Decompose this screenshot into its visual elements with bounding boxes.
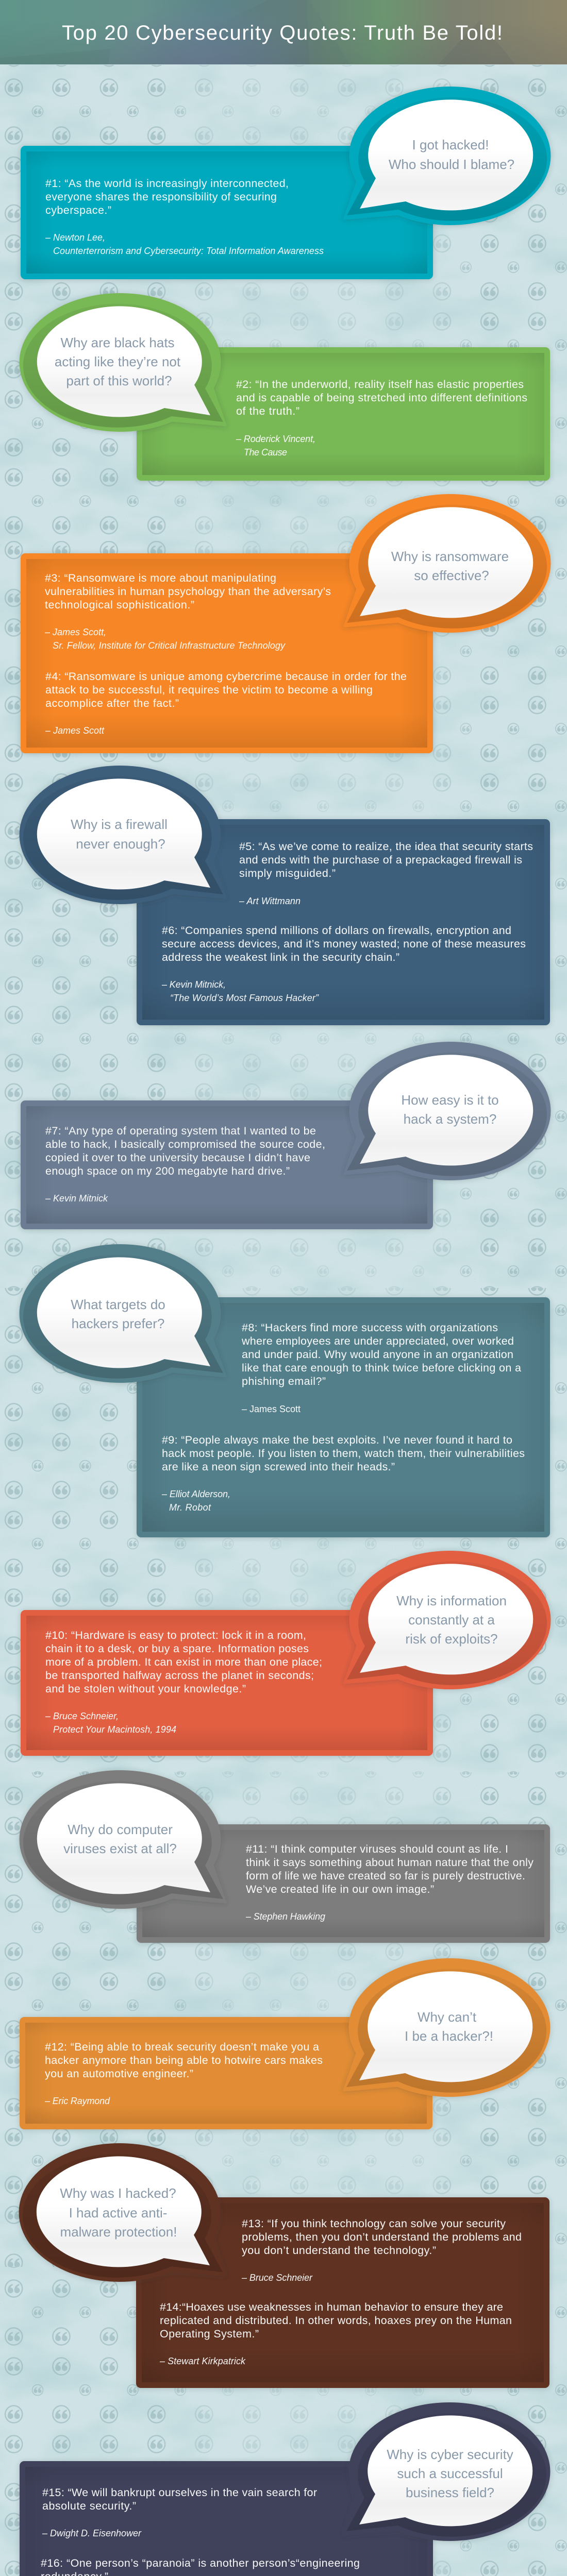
panel: quotes 13 and 14: Operating System.”	[160, 2328, 259, 2340]
panel: quotes 3 and 4: attack to be successful, it requires the victim to become a willing	[45, 684, 373, 696]
panel: quotes 3 and 4: – James Scott	[45, 725, 105, 736]
panel: quote 11: We’ve created life in our own image.”	[246, 1883, 434, 1895]
speech bubble 1	[345, 88, 549, 224]
speech bubble 9: Why can’t	[418, 2009, 477, 2025]
speech bubble 11: such a successful	[397, 2466, 503, 2481]
speech bubble 3: Why is ransomware	[391, 549, 509, 564]
speech bubble 10	[20, 2144, 225, 2280]
speech bubble 2: acting like they’re not	[55, 354, 181, 369]
panel: quotes 15 and 16: #15: “We will bankrupt ourselves in the vain search for	[42, 2486, 317, 2499]
panel: quote 10: Protect Your Macintosh, 1994	[53, 1724, 176, 1735]
panel: quote 12: you an automotive engineer.”	[45, 2067, 193, 2080]
speech bubble 10: I had active anti-	[69, 2205, 167, 2221]
panel: quotes 5 and 6: secure access devices, and it’s money wasted; none of these measures	[162, 938, 526, 950]
panel: quote 2: of the truth.”	[236, 405, 299, 417]
speech bubble 7: Why is information	[396, 1593, 507, 1608]
panel: quote 11: form of life we have created so far is purely destructive.	[246, 1870, 525, 1882]
panel: quote 1: cyberspace.”	[45, 204, 111, 216]
panel: quote 7	[21, 1100, 433, 1229]
speech bubble 7: risk of exploits?	[405, 1631, 498, 1647]
header banner	[0, 0, 567, 64]
panel: quotes 8 and 9: like that care enough to think twice before clicking on a	[242, 1362, 521, 1374]
speech bubble 5	[345, 1043, 549, 1179]
speech bubble 6: hackers prefer?	[72, 1316, 164, 1331]
speech bubble 1: Who should I blame?	[389, 157, 514, 172]
speech bubble 7: constantly at a	[408, 1612, 495, 1628]
panel: quotes 8 and 9: – Elliot Alderson,	[161, 1489, 230, 1499]
panel: quotes 8 and 9: are like a neon sign screwed into their heads.”	[162, 1461, 395, 1473]
panel: quotes 3 and 4	[21, 553, 433, 753]
panel: quote 10: and be stolen without your knowledge.”	[45, 1683, 246, 1695]
panel: quotes 8 and 9: #9: “People always make the best exploits. I’ve never found it hard to	[162, 1434, 512, 1446]
speech bubble 2: Why are black hats	[60, 335, 175, 350]
speech bubble 4: never enough?	[76, 836, 165, 852]
panel: quotes 5 and 6: and ends with the purchase of a prepackaged firewall is	[239, 854, 522, 866]
speech bubble 4: Why is a firewall	[71, 817, 168, 832]
panel: quote 7: enough space on my 200 megabyte hard drive.”	[45, 1165, 290, 1177]
speech bubble 11: Why is cyber security	[387, 2447, 513, 2462]
panel: quote 2: The Cause	[244, 447, 287, 457]
speech bubble 3	[345, 495, 549, 631]
panel: quote 10	[21, 1610, 433, 1756]
panel: quote 2	[137, 347, 550, 481]
panel: quotes 3 and 4: technological sophistication.”	[45, 599, 194, 611]
panel: quotes 15 and 16: – Dwight D. Eisenhower	[42, 2528, 142, 2538]
panel: quote 11: – Stephen Hawking	[245, 1911, 325, 1922]
panel: quotes 3 and 4: #3: “Ransomware is more about manipulating	[45, 572, 276, 584]
panel: quotes 3 and 4: – James Scott,	[44, 627, 106, 637]
panel: quote 11: think it says something about human nature that the only	[246, 1856, 533, 1869]
speech bubble 7	[345, 1552, 549, 1688]
panel: quote 2: #2: “In the underworld, reality itself has elastic properties	[236, 378, 524, 391]
panel: quotes 5 and 6: #5: “As we’ve come to realize, the idea that security starts	[239, 840, 533, 853]
panel: quotes 3 and 4: vulnerabilities in human psychology than the adversary’s	[45, 585, 331, 598]
panel: quote 10: #10: “Hardware is easy to protect: lock it in a room,	[45, 1629, 306, 1641]
panel: quote 7: #7: “Any type of operating system that I wanted to be	[45, 1125, 316, 1137]
speech bubble 2	[21, 294, 225, 430]
panel: quotes 13 and 14	[136, 2197, 549, 2388]
speech bubble 9	[344, 1959, 549, 2095]
panel: quotes 8 and 9	[137, 1297, 550, 1537]
panel: quote 7: copied it over to the university because I didn’t have	[45, 1151, 310, 1164]
panel: quotes 8 and 9: #8: “Hackers find more success with organizations	[242, 1321, 498, 1334]
title: Top 20 Cybersecurity Quotes: Truth Be Told!	[62, 22, 503, 44]
panel: quotes 5 and 6: address the weakest link in the security chain.”	[162, 951, 399, 963]
panel: quotes 5 and 6: simply misguided.”	[239, 867, 336, 879]
panel: quote 12: #12: “Being able to break security doesn’t make you a	[45, 2041, 319, 2053]
panel: quotes 8 and 9: and under paid. Why would anyone in an organization	[242, 1348, 513, 1361]
panel: quote 1: Counterterrorism and Cybersecurity: Total Information Awareness	[53, 246, 324, 256]
panel: quote 10: chain it to a desk, or buy a spare. Information poses	[45, 1642, 309, 1655]
speech bubble 5: How easy is it to	[401, 1092, 499, 1108]
panel: quote 11: #11: “I think computer viruses should count as life. I	[246, 1843, 508, 1855]
panel: quote 2: – Roderick Vincent,	[236, 434, 315, 444]
panel: quotes 8 and 9: phishing email?”	[242, 1375, 326, 1387]
panel: quotes 15 and 16: absolute security.”	[42, 2500, 136, 2512]
panel: quotes 13 and 14: – Stewart Kirkpatrick	[159, 2356, 246, 2366]
panel: quote 1: #1: “As the world is increasingly interconnected,	[45, 177, 289, 190]
panel: quotes 13 and 14: you don’t understand the technology.”	[242, 2244, 436, 2257]
panel: quotes 5 and 6	[137, 819, 550, 1025]
panel: quote 1	[21, 146, 433, 279]
speech bubble 5: hack a system?	[404, 1111, 496, 1127]
panel: quote 12: – Eric Raymond	[44, 2096, 110, 2106]
panel: quotes 13 and 14: #13: “If you think technology can solve your security	[242, 2217, 506, 2230]
speech bubble 11: business field?	[406, 2485, 494, 2500]
speech bubble 6: What targets do	[71, 1297, 165, 1312]
speech bubble 3: so effective?	[414, 568, 489, 583]
speech bubble 1: I got hacked!	[412, 137, 489, 152]
panel: quote 11	[137, 1824, 550, 1943]
speech bubble 10: malware protection!	[60, 2224, 177, 2240]
speech bubble 8: viruses exist at all?	[63, 1841, 177, 1856]
panel: quote 10: more of a problem. It can exist in more than one place;	[45, 1656, 322, 1668]
panel: quotes 5 and 6: – Kevin Mitnick,	[161, 979, 226, 990]
speech bubble 9: I be a hacker?!	[405, 2028, 493, 2044]
panel: quotes 8 and 9: – James Scott	[242, 1404, 301, 1414]
panel: quotes 15 and 16: #16: “One person’s “paranoia” is another person’s“engineering	[41, 2557, 360, 2569]
panel: quotes 13 and 14: #14:“Hoaxes use weaknesses in human behavior to ensure they are	[160, 2301, 503, 2313]
panel: quote 10: be transported halfway across the planet in seconds;	[45, 1669, 314, 1682]
panel: quotes 8 and 9: Mr. Robot	[169, 1502, 211, 1513]
speech bubble 2: part of this world?	[66, 373, 172, 388]
panel: quote 1: everyone shares the responsibility of securing	[45, 191, 277, 203]
panel: quote 2: and is capable of being stretched into different definitions	[236, 392, 527, 404]
panel: quote 1: – Newton Lee,	[45, 232, 105, 243]
speech bubble 10: Why was I hacked?	[60, 2185, 176, 2201]
panel: quotes 5 and 6: #6: “Companies spend millions of dollars on firewalls, encryption and	[162, 924, 511, 937]
panel: quote 12	[20, 2017, 432, 2129]
panel: quotes 15 and 16	[20, 2461, 433, 2576]
panel: quote 10: – Bruce Schneier,	[45, 1711, 119, 1721]
speech bubble 11	[344, 2403, 549, 2539]
panel: quote 12: hacker anymore than being able to hotwire cars makes	[45, 2054, 323, 2066]
speech bubble 4	[21, 767, 225, 903]
panel: quotes 13 and 14: problems, then you don’t understand the problems and	[242, 2231, 522, 2243]
speech bubble 8: Why do computer	[68, 1822, 173, 1837]
panel: quotes 8 and 9: where employees are under appreciated, over worked	[241, 1335, 514, 1347]
panel: quote 7: able to hack, I basically compromised the source code,	[45, 1138, 325, 1150]
panel: quote 7: – Kevin Mitnick	[45, 1193, 108, 1204]
panel: quotes 3 and 4: accomplice after the fact.”	[45, 697, 179, 709]
panel: quotes 5 and 6: – Art Wittmann	[239, 896, 301, 906]
panel: quotes 3 and 4: #4: “Ransomware is unique among cybercrime because in order for the	[45, 670, 407, 683]
panel: quotes 3 and 4: Sr. Fellow, Institute for Critical Infrastructure Technology	[53, 640, 286, 651]
panel: quotes 5 and 6: “The World’s Most Famous Hacker”	[170, 993, 319, 1003]
speech bubble 8	[21, 1771, 225, 1907]
panel: quotes 8 and 9: hack most people. If you listen to them, watch them, their vulnerabilities	[162, 1447, 525, 1460]
panel: quotes 13 and 14: – Bruce Schneier	[241, 2273, 313, 2283]
panel: quotes 13 and 14: replicated and distributed. In other words, hoaxes prey on the Human	[160, 2314, 512, 2327]
speech bubble 6	[21, 1245, 225, 1381]
